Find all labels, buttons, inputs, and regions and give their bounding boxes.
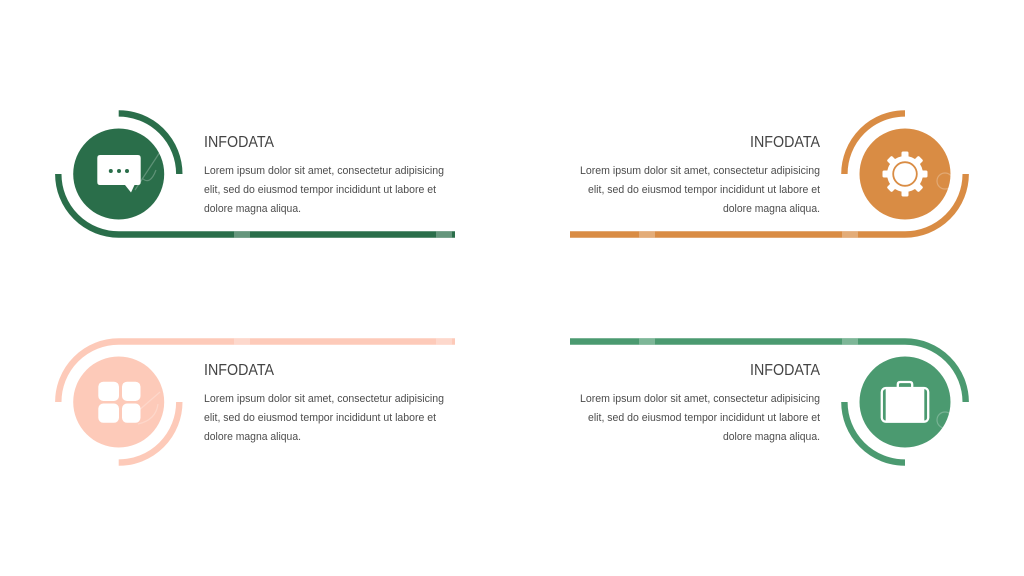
heading: INFODATA — [204, 134, 275, 151]
heading: INFODATA — [750, 362, 821, 379]
faint watermark marks — [130, 152, 953, 428]
heading: INFODATA — [204, 362, 275, 379]
text block — [580, 393, 821, 443]
text block: elit, sed do eiusmod tempor incididunt ut labore et — [204, 412, 437, 424]
icon: four tiles — [98, 382, 140, 423]
outer arc and bar — [58, 174, 455, 234]
text block — [580, 165, 821, 215]
upper arc — [119, 113, 179, 174]
text block: dolore magna aliqua. — [723, 431, 820, 443]
circle — [73, 356, 164, 448]
icon: briefcase — [882, 382, 928, 422]
text block: elit, sed do eiusmod tempor incididunt ut labore et — [588, 184, 821, 196]
text block — [204, 393, 444, 443]
panel: top right — [570, 113, 966, 234]
icon: gear — [882, 152, 928, 196]
circle — [860, 356, 950, 448]
heading: INFODATA — [750, 134, 821, 151]
text block: Lorem ipsum dolor sit amet, consectetur adipisicing — [204, 165, 444, 177]
text block: elit, sed do eiusmod tempor incididunt ut labore et — [204, 184, 437, 196]
text block: Lorem ipsum dolor sit amet, consectetur adipisicing — [204, 393, 444, 405]
panel: bottom left — [58, 342, 455, 463]
icon: speech bubble — [97, 155, 141, 192]
panel: bottom right — [570, 342, 966, 463]
outer arc and bar — [58, 342, 455, 402]
text block: dolore magna aliqua. — [723, 203, 820, 215]
lower arc — [119, 402, 179, 463]
text block: Lorem ipsum dolor sit amet, consectetur adipisicing — [580, 393, 820, 405]
outer arc and bar — [570, 174, 966, 234]
outer arc and bar — [570, 342, 966, 402]
panel: top left — [58, 113, 455, 234]
text block — [204, 165, 444, 215]
text block: Lorem ipsum dolor sit amet, consectetur adipisicing — [580, 165, 820, 177]
upper arc — [844, 113, 905, 174]
text block: dolore magna aliqua. — [204, 203, 301, 215]
text block: dolore magna aliqua. — [204, 431, 301, 443]
text block: elit, sed do eiusmod tempor incididunt ut labore et — [588, 412, 821, 424]
circle — [860, 128, 950, 220]
lower arc — [844, 402, 905, 463]
circle — [73, 128, 164, 220]
